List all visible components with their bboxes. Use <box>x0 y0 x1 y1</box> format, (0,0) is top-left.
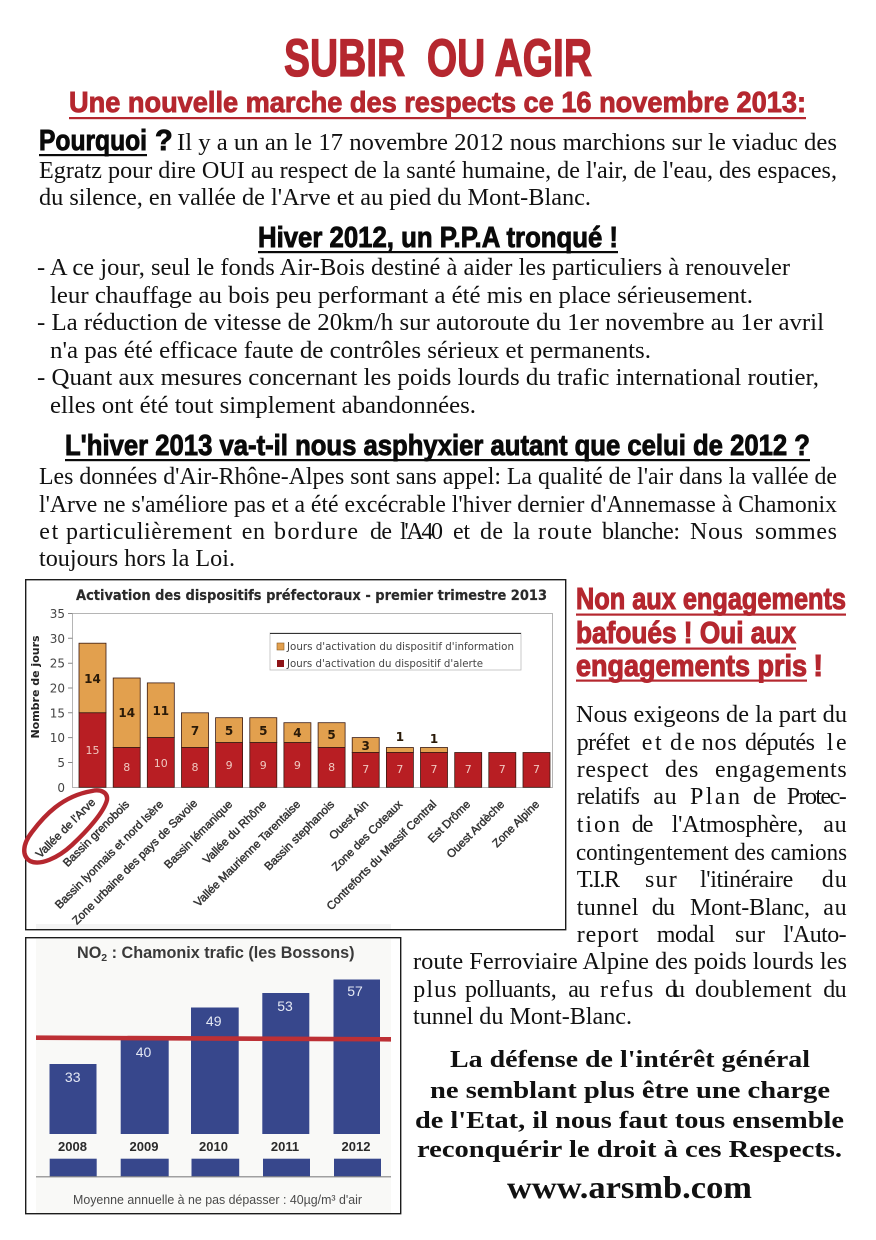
heading: non aux engagements: ! <box>813 648 823 683</box>
text block: nous exigeons: sur <box>735 922 765 948</box>
chart note: Moyenne annuelle à ne pas dépasser : 40µg/m³ d'air <box>73 1192 363 1207</box>
text block: list of measures <box>37 255 824 419</box>
text block: air quality data: Nous <box>690 519 743 545</box>
chart title: Activation des dispositifs préfectoraux - premier trimestre 2013 <box>76 588 547 604</box>
bar values: 11 <box>152 704 169 718</box>
bar values: 9 <box>260 759 267 772</box>
text block: nous exigeons: Protec- <box>787 784 847 810</box>
text block: air quality data: particulièrement <box>66 519 232 545</box>
values: 40 <box>136 1044 151 1060</box>
bar values: 5 <box>225 724 233 738</box>
text block: pourquoi <box>39 125 837 211</box>
text block: nous exigeons: contingentement des camions <box>576 840 847 866</box>
text block: nous exigeons: Nous exigeons de la part du <box>576 702 847 728</box>
heading: pourquoi: ? <box>155 125 173 157</box>
x axis labels: Zone urbaine des pays de Savoie <box>70 798 200 927</box>
text block: air quality data: de <box>370 519 392 545</box>
bar values: 7 <box>533 763 540 776</box>
years <box>58 1139 370 1154</box>
years: 2009 <box>130 1139 158 1154</box>
y axis: 25 <box>50 656 65 670</box>
y axis: Nombre de jours <box>29 635 42 739</box>
bar values: 1 <box>396 730 404 744</box>
text block: air quality data: et <box>453 519 470 545</box>
x axis labels: Vallée de l'Arve <box>34 797 98 861</box>
text block: nous exigeons: et <box>642 730 662 756</box>
x axis labels: Bassin lémanique <box>162 799 235 871</box>
y axis <box>29 607 72 795</box>
text block: nous exigeons: l'itinéraire <box>700 867 793 893</box>
text block: nous exigeons: du <box>665 977 685 1003</box>
years: 2010 <box>199 1139 228 1154</box>
text block: nous exigeons: Plan <box>690 784 740 810</box>
x axis labels: Bassin grenobois <box>61 798 132 870</box>
text block: nous exigeons: report <box>577 922 639 948</box>
text block: nous exigeons: tunnel du Mont-Blanc. <box>413 1004 632 1030</box>
text block: nous exigeons: des <box>665 757 698 783</box>
text block: pourquoi: Egratz pour dire OUI au respect de la santé humaine, de l'air, de l'eau, des espaces, <box>39 158 837 184</box>
bar chart: activation des dispositifs <box>24 580 566 930</box>
y axis: 35 <box>50 607 65 621</box>
bar values: 7 <box>396 763 403 776</box>
bars <box>50 980 381 1177</box>
heading: non aux engagements: bafoués ! Oui aux <box>576 615 797 650</box>
text block: nous exigeons: doublement <box>695 977 812 1003</box>
text block: list of measures: - La réduction de vitesse de 20km/h sur autoroute du 1er novembre au 1er avril <box>37 310 824 336</box>
text block: air quality data: blanche: <box>602 519 680 545</box>
text block: nous exigeons: sur <box>645 867 677 893</box>
x axis labels: Bassin lyonnais et nord Isère <box>53 799 166 912</box>
years: 2012 <box>342 1139 370 1154</box>
heading: non aux engagements: engagements pris <box>576 648 807 683</box>
text block: list of measures: leur chauffage au bois peu performant a été mis en place sérieusement. <box>50 283 753 309</box>
y axis: 10 <box>50 731 65 745</box>
text block: nous exigeons <box>413 702 847 1030</box>
text block: nous exigeons: de <box>670 730 695 756</box>
text block: list of measures: - Quant aux mesures concernant les poids lourds du trafic international routier, <box>37 365 819 391</box>
text block: air quality data: route <box>538 519 592 545</box>
x axis labels: Vallée du Rhône <box>201 799 269 867</box>
x axis labels: Ouest Ardèche <box>445 799 507 861</box>
text block: air quality data <box>39 464 837 572</box>
text block: nous exigeons: au <box>823 812 847 838</box>
bar values: 14 <box>84 672 101 686</box>
text block: nous exigeons: du <box>822 867 847 893</box>
text block: air quality data: bordure <box>274 519 358 545</box>
heading: non aux engagements <box>576 581 846 683</box>
chart title: 2 <box>101 952 107 964</box>
text block: nous exigeons: tion <box>577 812 620 838</box>
y axis: 30 <box>50 632 65 646</box>
bar chart: NO2 Chamonix <box>26 938 401 1214</box>
bar values: 8 <box>328 761 335 774</box>
text block: nous exigeons: polluants, <box>465 977 557 1003</box>
bar values <box>84 672 540 776</box>
bar values: 7 <box>430 763 438 776</box>
website: www.arsmb.com <box>507 1169 752 1205</box>
heading: pourquoi: Pourquoi <box>39 125 147 157</box>
text block: air quality data: et <box>39 519 59 545</box>
text block: air quality data: l'Arve ne s'améliore pas et a été excécrable l'hiver dernier d'Annemasse à Chamonix <box>39 492 837 518</box>
stacked bars <box>79 643 550 787</box>
text block: nous exigeons: l'Auto- <box>783 922 847 948</box>
chart title: : Chamonix trafic (les Bossons) <box>107 944 354 962</box>
text block: nous exigeons: T.I.R <box>577 867 620 893</box>
x axis labels: Contreforts du Massif Central <box>325 799 439 913</box>
text block: pourquoi: Il y a un an le 17 novembre 2012 nous marchions sur le viaduc des <box>177 130 837 156</box>
bar values: 15 <box>86 744 100 757</box>
x axis labels: Bassin stephanois <box>263 798 337 873</box>
bar values: 7 <box>465 763 472 776</box>
callout: intérêt général: La défense de l'intérêt général <box>450 1047 810 1073</box>
x axis labels: Ouest Ain <box>327 799 371 842</box>
bar values: 9 <box>226 759 233 772</box>
bar values: 3 <box>362 739 370 753</box>
x axis labels: Zone des Coteaux <box>330 798 405 874</box>
y axis: 15 <box>50 706 65 720</box>
text block: air quality data: sommes <box>755 519 837 545</box>
x axis labels: Zone Alpine <box>491 799 542 850</box>
red circle around Vallée de l'Arve <box>24 790 107 863</box>
y axis: 0 <box>57 781 65 795</box>
bar values: 4 <box>293 726 302 740</box>
text block: nous exigeons: préfet <box>577 730 630 756</box>
text block: nous exigeons: de <box>632 812 653 838</box>
text block: nous exigeons: le <box>827 730 847 756</box>
values: 53 <box>277 998 293 1014</box>
text block: nous exigeons: du <box>652 895 675 921</box>
text block: nous exigeons: plus <box>413 977 457 1003</box>
callout: intérêt général: ne semblant plus être une charge <box>430 1078 830 1104</box>
text block: list of measures: n'a pas été efficace faute de contrôles sérieux et permanents. <box>50 338 651 364</box>
values: 49 <box>206 1013 222 1029</box>
callout: intérêt général: de l'Etat, il nous faut tous ensemble <box>415 1108 844 1134</box>
text block: nous exigeons: refus <box>600 977 653 1003</box>
bar values: 7 <box>191 724 199 738</box>
chart title: NO <box>77 944 101 962</box>
text block: nous exigeons: du <box>823 977 847 1003</box>
text block: nous exigeons: députés <box>745 730 815 756</box>
text block: nous exigeons: nos <box>702 730 737 756</box>
text block: list of measures: elles ont été tout simplement abandonnées. <box>50 393 476 419</box>
bar values: 8 <box>123 761 130 774</box>
legend <box>270 633 521 670</box>
legend: Jours d'activation du dispositif d'alerte <box>286 657 483 670</box>
text block: nous exigeons: modal <box>657 922 715 948</box>
subtitle: Une nouvelle marche des respects ce 16 novembre 2013: <box>69 87 806 119</box>
text block: pourquoi: du silence, en vallée de l'Arve et au pied du Mont-Blanc. <box>39 185 591 211</box>
text block: nous exigeons: relatifs <box>577 784 640 810</box>
limit line <box>36 1038 391 1039</box>
bar values: 14 <box>118 706 135 720</box>
text block: nous exigeons: de <box>753 784 776 810</box>
heading: hiver 2012: Hiver 2012, un P.P.A tronqué ! <box>258 222 618 254</box>
bar values: 7 <box>499 763 506 776</box>
text block: nous exigeons: respect <box>577 757 649 783</box>
text block: nous exigeons: au <box>823 895 847 921</box>
y axis: 5 <box>57 756 65 770</box>
title: SUBIR OU AGIR <box>284 29 592 88</box>
text block: list of measures: - A ce jour, seul le fonds Air-Bois destiné à aider les particuliers à renouveler <box>37 255 790 281</box>
bar values: 9 <box>294 759 301 772</box>
text block: air quality data: l'A40 <box>400 519 443 545</box>
callout: intérêt général: reconquérir le droit à ces Respects. <box>417 1137 842 1163</box>
legend: Jours d'activation du dispositif d'information <box>286 640 514 653</box>
years: 2008 <box>58 1139 87 1154</box>
text block: nous exigeons: l'Atmosphère, <box>672 812 803 838</box>
text block: air quality data: la <box>513 519 530 545</box>
values: 57 <box>347 983 363 999</box>
values: 33 <box>65 1069 81 1085</box>
text block: air quality data: de <box>480 519 503 545</box>
text block: nous exigeons: au <box>568 977 590 1003</box>
y axis: 20 <box>50 682 65 696</box>
bar values: 5 <box>327 728 336 742</box>
text block: air quality data: Les données d'Air-Rhône-Alpes sont sans appel: La qualité de l'air dans la vallée de <box>39 464 837 490</box>
bar values: 8 <box>192 761 198 774</box>
bar values: 1 <box>430 732 438 746</box>
text block: nous exigeons: au <box>653 784 677 810</box>
values <box>65 983 363 1085</box>
bar values: 10 <box>154 757 168 770</box>
text block: nous exigeons: Mont-Blanc, <box>690 895 810 921</box>
text block: air quality data: en <box>242 519 265 545</box>
text block: nous exigeons: tunnel <box>577 895 639 921</box>
x axis labels: Vallée Maurienne Tarentaise <box>192 799 303 909</box>
text block: air quality data: toujours hors la Loi. <box>39 546 235 572</box>
years: 2011 <box>271 1139 299 1154</box>
bar values: 7 <box>362 763 369 776</box>
text block: nous exigeons: route Ferroviaire Alpine des poids lourds les <box>413 949 847 975</box>
text block: nous exigeons: engagements <box>715 757 847 783</box>
x axis labels <box>34 797 542 927</box>
callout: intérêt général <box>415 1047 844 1163</box>
x axis labels: Est Drôme <box>426 799 473 846</box>
bar values: 5 <box>259 724 267 738</box>
